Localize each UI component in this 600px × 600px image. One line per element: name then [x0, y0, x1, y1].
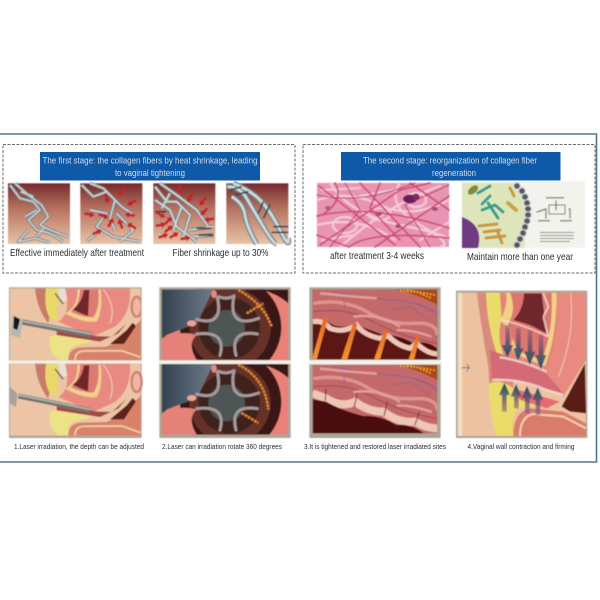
caption: fiber shrinkage: Fiber shrinkage up to 30% — [172, 247, 268, 259]
caption: maintain: Maintain more than one year — [467, 251, 573, 263]
image: rotation bottom — [161, 364, 289, 436]
dashed border: second stage — [303, 144, 595, 273]
image: vaginal wall contraction — [456, 291, 587, 438]
heat arrows — [84, 186, 138, 237]
panel: second stage — [303, 144, 595, 273]
contraction arrows — [499, 325, 546, 415]
image: tissue with laser beams — [312, 289, 437, 359]
panel: first stage — [3, 144, 295, 273]
image: probe adjusted — [10, 364, 142, 436]
heat arrows — [155, 184, 215, 242]
images: rotating laser — [158, 286, 292, 438]
caption: step 4: 4.Vaginal wall contraction and firming — [468, 442, 574, 451]
caption: after treatment: after treatment 3-4 weeks — [330, 250, 424, 262]
banner: first stage heading — [40, 152, 260, 180]
image: rotation top — [161, 288, 289, 360]
image: collagen regeneration diagram — [462, 181, 585, 248]
images: laser probe anatomy — [9, 287, 142, 438]
image: fiber before treatment — [8, 183, 70, 244]
dashed border: first stage — [3, 144, 295, 273]
banner: second stage heading — [341, 152, 560, 180]
caption: step 3: 3.It is tightened and restored laser irradiated sites — [304, 442, 446, 451]
panel: step 3 tightened — [304, 287, 446, 451]
caption: effective immediately: Effective immediately after treatment — [10, 247, 144, 259]
image: fiber tightened — [226, 183, 289, 244]
caption: step 1: 1.Laser irradiation, the depth can be adjusted — [14, 442, 144, 451]
banner: second stage heading: The second stage: reorganization of collagen fiber — [363, 156, 537, 166]
image: tissue restored — [313, 365, 437, 433]
image: fiber with heat arrows — [80, 183, 142, 244]
panel: step 1 laser depth — [9, 287, 144, 451]
laser beams — [312, 317, 420, 359]
panel: step 4 contraction — [456, 291, 587, 451]
banner: second stage heading: regeneration — [432, 168, 476, 178]
images: tissue restoration — [309, 287, 441, 438]
bead column — [514, 183, 531, 248]
image: histology collagen fibers — [317, 183, 449, 247]
banner: first stage heading: The first stage: the collagen fibers by heat shrinkage, leading — [42, 156, 258, 166]
fiber images row — [8, 183, 289, 244]
image: probe inserted — [10, 288, 142, 360]
banner: first stage heading: to vaginal tightening — [115, 168, 185, 178]
outer frame — [0, 134, 596, 462]
panel: step 2 rotate 360 — [159, 277, 291, 453]
image: fiber shrinking — [153, 183, 215, 244]
caption: step 2: 2.Laser can irradiation rotate 360 degrees — [162, 442, 282, 451]
